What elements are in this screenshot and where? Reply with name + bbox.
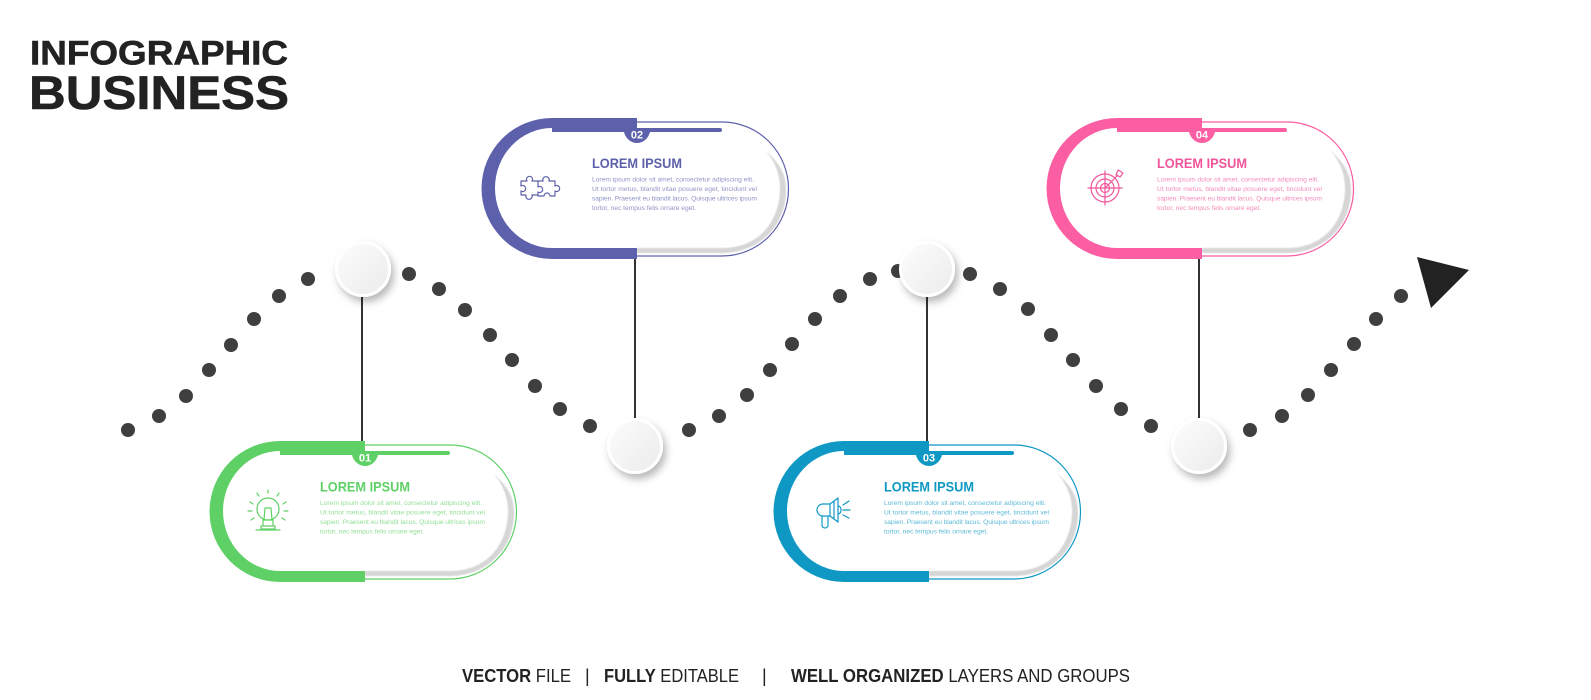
text block: LOREM IPSUM <box>592 156 682 171</box>
step number <box>624 128 650 143</box>
text block: tortor, nec tempus felis ornare eget. <box>1157 205 1261 212</box>
text block <box>884 480 1050 536</box>
node circles <box>336 242 1226 472</box>
text block: Lorem ipsum dolor sit amet, consectetur adipiscing elit. <box>884 500 1046 507</box>
text block: tortor, nec tempus felis ornare eget. <box>320 528 424 536</box>
text block <box>320 480 486 536</box>
footer tagline: FULLY EDITABLE <box>604 666 739 686</box>
step number <box>352 451 378 466</box>
panel: step 02 purple <box>482 118 788 259</box>
footer tagline: WELL ORGANIZED LAYERS AND GROUPS <box>791 666 1130 686</box>
footer tagline: | <box>762 666 767 686</box>
footer tagline: VECTOR FILE <box>462 666 571 686</box>
icon: puzzle <box>521 176 560 199</box>
text block <box>1157 156 1322 212</box>
text block: Lorem ipsum dolor sit amet, consectetur adipiscing elit. <box>320 500 482 507</box>
title: INFOGRAPHIC <box>30 34 288 72</box>
text block: LOREM IPSUM <box>1157 156 1247 171</box>
footer tagline <box>462 666 1130 686</box>
icon: target <box>1088 170 1123 205</box>
title: BUSINESS <box>29 66 289 119</box>
panel: step 03 blue <box>774 441 1080 582</box>
text block: tortor, nec tempus felis ornare eget. <box>592 205 696 212</box>
step number <box>1188 128 1216 143</box>
text block: sapien. Praesent eu blandit lacus. Quisque ultrices ipsum <box>1157 196 1322 202</box>
text block: Ut tortor metus, blandit vitae posuere eget, tincidunt vel <box>592 186 758 193</box>
text block: tortor, nec tempus felis ornare eget. <box>884 528 988 536</box>
panel: step 04 pink <box>1047 118 1354 259</box>
text block: Ut tortor metus, blandit vitae posuere eget, tincidunt vel <box>884 510 1050 516</box>
step number: 04 <box>1196 130 1209 142</box>
text block: LOREM IPSUM <box>884 480 974 494</box>
text block: Lorem ipsum dolor sit amet, consectetur adipiscing elit. <box>1157 176 1319 184</box>
arrow head <box>1417 257 1469 308</box>
text block: Lorem ipsum dolor sit amet, consectetur adipiscing elit. <box>592 176 754 184</box>
icon: megaphone <box>817 498 850 528</box>
icon: light bulb <box>248 490 288 530</box>
text block: Ut tortor metus, blandit vitae posuere eget, tincidunt vel <box>320 510 486 516</box>
text block: LOREM IPSUM <box>320 480 410 494</box>
text block <box>592 156 758 212</box>
text block: sapien. Praesent eu blandit lacus. Quisque ultrices ipsum <box>592 196 757 202</box>
dotted path <box>121 264 1408 437</box>
text block: Ut tortor metus, blandit vitae posuere eget, tincidunt vel <box>1157 186 1322 193</box>
footer tagline: | <box>585 666 590 686</box>
text block: sapien. Praesent eu blandit lacus. Quisque ultrices ipsum <box>320 519 485 526</box>
text block: sapien. Praesent eu blandit lacus. Quisque ultrices ipsum <box>884 519 1049 526</box>
step number: 02 <box>631 130 643 142</box>
step number: 03 <box>923 452 935 464</box>
title <box>29 34 289 119</box>
panel: step 01 green <box>210 441 516 582</box>
connector lines <box>362 258 1199 442</box>
step number <box>916 451 942 466</box>
step number: 01 <box>359 452 371 464</box>
